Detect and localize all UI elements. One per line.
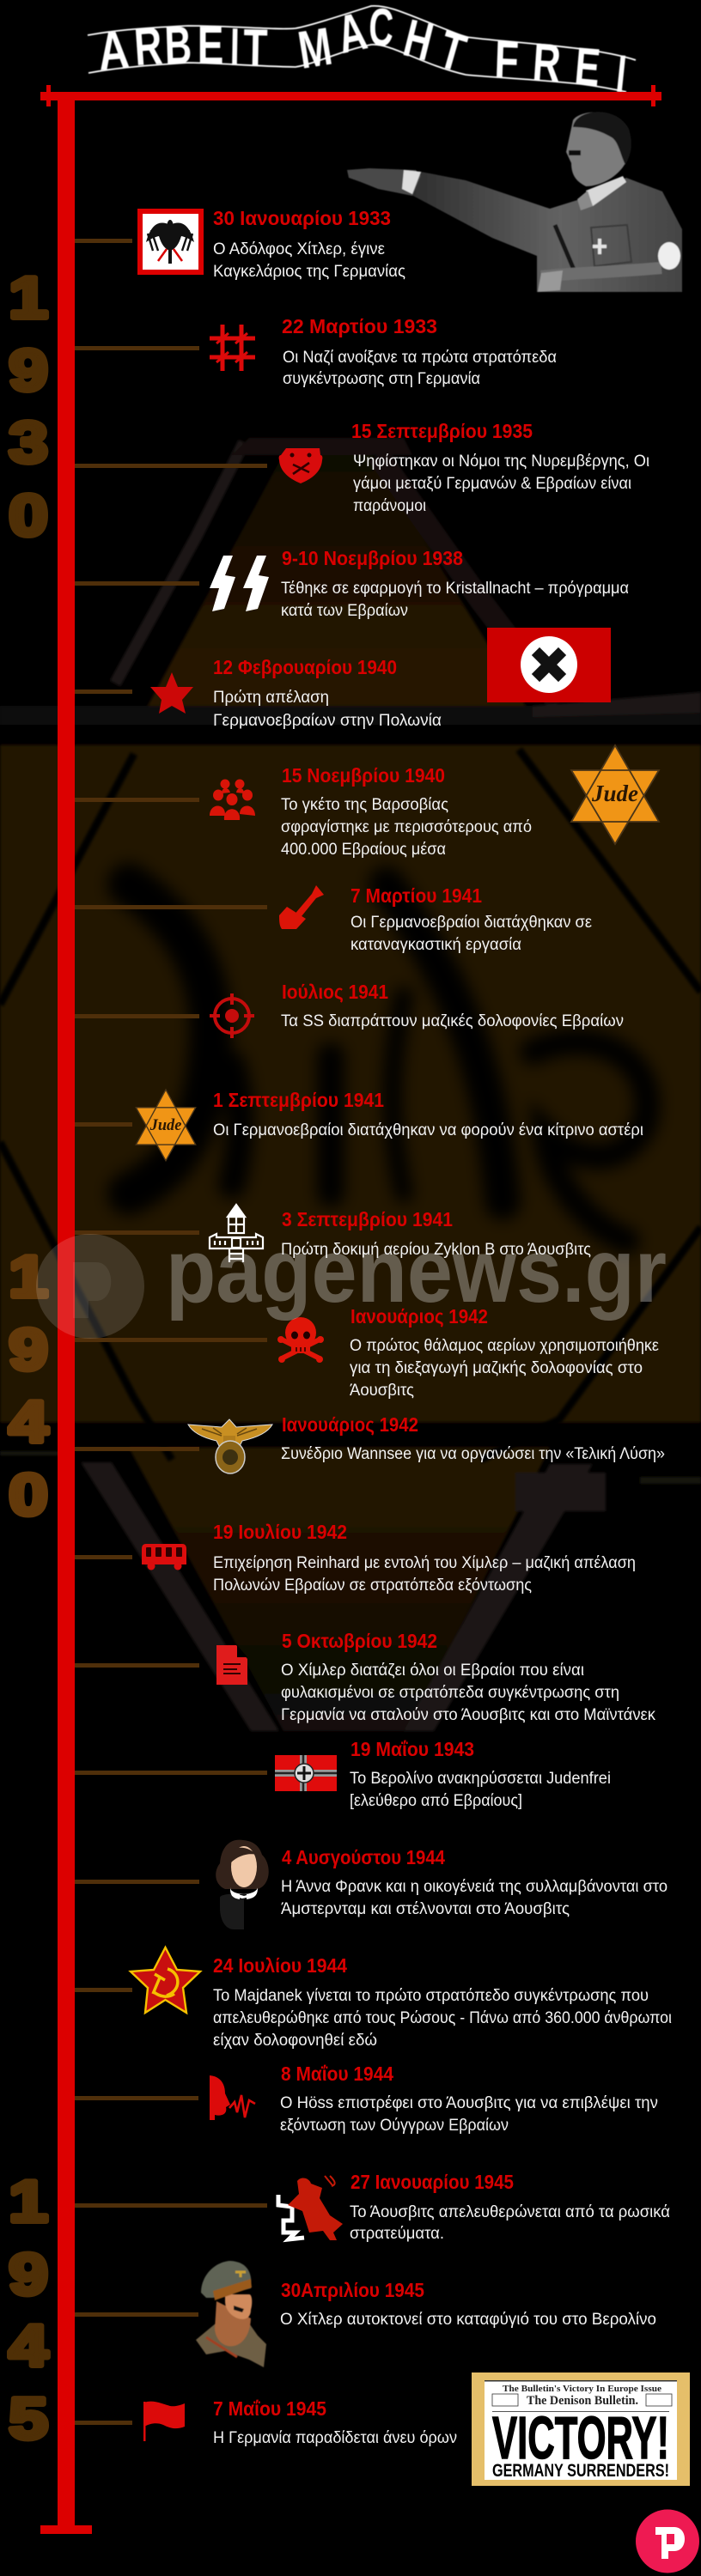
description [353,453,649,515]
description [281,580,629,620]
title banner: Arbeit Macht Frei: T [433,20,472,83]
title banner: Arbeit Macht Frei: R [531,33,563,94]
event: 19 July 1942 [75,1521,636,1595]
title banner: Arbeit Macht Frei: I [229,16,240,76]
decade label: 1945: 9 [9,2241,48,2306]
description: γάμοι μεταξύ Γερμανών & Εβραίων είναι [353,475,631,493]
title banner: Arbeit Macht Frei: T [243,18,268,78]
description [350,1337,659,1400]
description [213,1554,636,1595]
armband [658,242,680,270]
connector [75,1122,132,1127]
connector [75,1338,267,1342]
description: Άμστερνταμ και στέλνονται στο Άουσβιτς [281,1900,570,1918]
connector [75,1988,132,1992]
icon: yellow star badge: Jude [149,1115,181,1134]
event: 15 November 1940 [75,764,532,859]
decade label: 1930: 9 [9,337,48,403]
connector [75,2421,132,2425]
description: Συνέδριο Wannsee για να οργανώσει την «Τελική Λύση» [281,1445,665,1463]
badge word: Jude [591,781,638,806]
icon: barbed wire [210,325,255,371]
connector [75,905,267,909]
description: καταναγκαστική εργασία [350,936,521,954]
title banner: Arbeit Macht Frei: E [572,37,602,98]
publisher logo [636,2509,699,2573]
date: 8 Μαΐου 1944 [281,2063,393,2085]
icon: document [216,1645,247,1685]
description: Ο Αδόλφος Χίτλερ, έγινε [213,240,386,258]
date: 27 Ιανουαρίου 1945 [350,2171,514,2193]
title banner: Arbeit Macht Frei: A [332,2,372,65]
description: [ελεύθερο από Εβραίους] [350,1792,522,1810]
icon: Soviet star [131,1947,200,2013]
event: 22 March 1933 [75,315,557,388]
event: 15 September 1935 [75,420,649,515]
decade label: 1930: 0 [9,483,48,548]
date: 22 Μαρτίου 1933 [282,315,437,337]
description: συγκέντρωσης στη Γερμανία [283,370,480,388]
date: 24 Ιουλίου 1944 [213,1954,347,1977]
connector [75,1663,199,1668]
decade label: 1940: 4 [9,1388,48,1454]
event: 5 October 1942 [75,1630,655,1724]
description: σφραγίστηκε με περισσότερους από [281,818,532,836]
image: newspaper front page: The Bulletin's Victory In Europe Issue [503,2384,661,2394]
connector [75,1447,199,1451]
description: Γερμανία να σταλούν στο Άουσβιτς και στο Μαϊντάνεκ [281,1706,655,1724]
image: newspaper front page: The Denison Bulletin. [527,2394,638,2408]
date: 30 Ιανουαρίου 1933 [213,207,391,229]
event: 30 January 1933 [75,207,405,281]
image: newspaper front page [472,2372,690,2486]
description: Οι Γερμανοεβραίοι διατάχθηκαν σε [350,914,593,932]
connector [75,2096,198,2100]
description [280,2094,658,2135]
watermark: pagenews.gr [36,1221,667,1339]
decade label: 1945: 1 [9,2168,48,2233]
date: 12 Φεβρουαρίου 1940 [213,656,397,678]
icon: target [210,993,254,1038]
title banner: Arbeit Macht Frei: I [613,43,629,104]
icon: bus [142,1544,186,1570]
icon: yellow star badge [136,1090,196,1161]
icon: red flag [143,2402,185,2441]
description: στρατεύματα. [350,2225,444,2243]
icon: war flag [275,1755,337,1791]
icon: twin lightning bolts [210,556,269,611]
event: 30 April 1945 [75,2261,656,2367]
icon: gagged mask [279,448,322,483]
connector [75,1555,132,1559]
connector [75,239,132,243]
event: 3 September 1941 [75,1205,591,1262]
connector [75,346,199,350]
title banner: Arbeit Macht Frei: B [163,16,192,76]
description [281,1662,655,1724]
event: 12 February 1940 [75,656,442,730]
description: Οι Ναζί ανοίξανε τα πρώτα στρατόπεδα [283,349,557,367]
title banner: Arbeit Macht Frei: E [198,15,223,76]
description: Πρώτη απέλαση [213,689,329,707]
description: παράνομοι [353,497,426,515]
decade label: 1930: 1 [9,264,48,330]
event: 27 January 1945 [75,2171,670,2243]
description [283,349,557,388]
date: 3 Σεπτεμβρίου 1941 [282,1208,453,1230]
description [213,1987,672,2050]
description: Ο Χίμλερ διατάζει όλοι οι Εβραίοι που είναι [281,1662,584,1680]
event: 1 September 1941 [75,1089,643,1161]
connector [75,2312,198,2317]
date: 7 Μαρτίου 1941 [350,884,482,907]
description: Γερμανοεβραίων στην Πολωνία [213,712,442,730]
decade label: 1930: 3 [9,409,48,474]
connector [75,798,199,802]
decade label: 1940: 1 [9,1243,48,1309]
title banner: Arbeit Macht Frei: M [294,16,336,80]
date: 5 Οκτωβρίου 1942 [282,1630,437,1652]
description: Η Άννα Φρανκ και η οικογένειά της συλλαμβάνονται στο [281,1878,667,1896]
description [350,914,593,954]
icon: black eagle crest [137,209,204,275]
event: 7 March 1941 [75,884,593,954]
description: φυλακισμένοι σε στρατόπεδα συγκέντρωσης στη [281,1684,619,1702]
image: red flag [487,628,611,702]
date: Ιούλιος 1941 [282,981,388,1003]
title banner: Arbeit Macht Frei: R [132,16,164,77]
description [350,1770,611,1810]
description: κατά των Εβραίων [281,602,408,620]
description [350,2203,670,2243]
description: εξόντωση των Ούγγρων Εβραίων [280,2117,509,2135]
description: Ο πρώτος θάλαμος αερίων χρησιμοποιήθηκε [350,1337,659,1355]
date: 4 Αυσγούστου 1944 [282,1846,445,1868]
icon: group of people [210,780,255,820]
description: Το γκέτο της Βαρσοβίας [281,796,448,814]
event: January 1942 (gas chamber) [75,1305,659,1400]
description: Άουσβιτς [350,1382,414,1400]
event: 24 July 1944 [75,1947,672,2050]
decade label: 1945: 4 [9,2312,48,2378]
description: Καγκελάριος της Γερμανίας [213,263,405,281]
description: Το Άουσβιτς απελευθερώνεται από τα ρωσικά [350,2203,670,2221]
icon: portrait of Anne Frank [216,1840,269,1929]
event: 4 August 1944 [75,1840,667,1929]
description: απελευθερώθηκε από τους Ρώσους - Πάνω από 360.000 άνθρωποι [213,2009,672,2027]
description: για τη διεξαγωγή μαζικής δολοφονίας στο [350,1359,643,1377]
date: 7 Μαΐου 1945 [213,2397,326,2420]
event: 19 May 1943 [75,1738,611,1810]
date: 9-10 Νοεμβρίου 1938 [282,547,463,569]
description: Ψηφίστηκαν οι Νόμοι της Νυρεμβέργης, Οι [353,453,649,471]
event: 7 May 1945 [75,2397,457,2447]
connector [75,464,267,468]
date: 1 Σεπτεμβρίου 1941 [213,1089,384,1111]
connector [75,1014,199,1018]
description: Πολωνών Εβραίων σε στρατόπεδα εξόντωσης [213,1577,532,1595]
description [281,1878,667,1918]
description: Ο Χίτλερ αυτοκτονεί στο καταφύγιό του στο Βερολίνο [280,2311,656,2329]
background: faded yellow star [0,438,701,1731]
image: yellow star badge (large) [571,745,659,844]
icon: speaking head [210,2075,255,2120]
decade label: 1945 [9,2168,48,2451]
icon: camp gatehouse [210,1205,263,1262]
description [281,796,532,859]
date: 30Απριλίου 1945 [281,2279,424,2301]
title banner: Arbeit Macht Frei: F [494,30,520,90]
date: Ιανουάριος 1942 [282,1413,418,1436]
event: July 1941 [75,981,624,1038]
connector [75,581,199,586]
portrait: saluting figure [347,112,682,292]
title banner: Arbeit Macht Frei [88,0,636,104]
date: 15 Σεπτεμβρίου 1935 [351,420,533,442]
description: Το Majdanek γίνεται το πρώτο στρατόπεδο συγκέντρωσης που [213,1987,649,2005]
event: 8 May 1944 [75,2063,658,2135]
emblem [522,638,576,691]
date: 19 Μαΐου 1943 [350,1738,474,1760]
description: Τα SS διαπράττουν μαζικές δολοφονίες Εβραίων [281,1012,624,1030]
event: 9-10 November 1938 [75,547,629,620]
connector [75,1230,199,1235]
description: Το Βερολίνο ανακηρύσσεται Judenfrei [350,1770,611,1788]
decade label: 1940: 0 [9,1461,48,1527]
watermark: pagenews.gr: pagenews.gr [166,1221,667,1321]
description: Τέθηκε σε εφαρμογή το Kristallnacht – πρόγραμμα [281,580,629,598]
title banner: Arbeit Macht Frei: A [95,19,131,82]
date: 19 Ιουλίου 1942 [213,1521,347,1543]
icon: gold eagle and wreath [188,1419,272,1473]
icon: shovel [279,885,324,929]
decade label: 1940: 9 [9,1316,48,1382]
decade label: 1945: 5 [9,2385,48,2451]
icon: red figure over broken white sign [278,2176,343,2240]
description: Ο Höss επιστρέφει στο Άουσβιτς για να επιβλέψει την [280,2094,658,2112]
description: είχαν δολοφονηθεί εδώ [213,2032,377,2050]
connector [75,1880,199,1884]
description: Πρώτη δοκιμή αερίου Zyklon B στο Άουσβιτς [281,1241,591,1259]
date: 15 Νοεμβρίου 1940 [282,764,445,787]
decade label: 1930 [9,264,48,548]
connector [75,690,132,694]
decade label: 1940 [9,1243,48,1527]
icon: skull and crossbones [277,1317,324,1363]
icon: red star [150,672,193,714]
description: 400.000 Εβραίους μέσα [281,841,446,859]
connector [75,2203,267,2208]
description [213,240,405,281]
description: Επιχείρηση Reinhard με εντολή του Χίμλερ – μαζική απέλαση [213,1554,636,1572]
date: Ιανουάριος 1942 [350,1305,488,1327]
title banner: Arbeit Macht Frei: H [398,9,438,72]
description: Οι Γερμανοεβραίοι διατάχθηκαν να φορούν ένα κίτρινο αστέρι [213,1121,643,1139]
connector [75,1771,267,1775]
icon: portrait in peaked cap [196,2261,266,2367]
description [213,689,442,730]
event: January 1942 (Wannsee) [75,1413,665,1473]
description: Η Γερμανία παραδίδεται άνευ όρων [213,2429,457,2447]
